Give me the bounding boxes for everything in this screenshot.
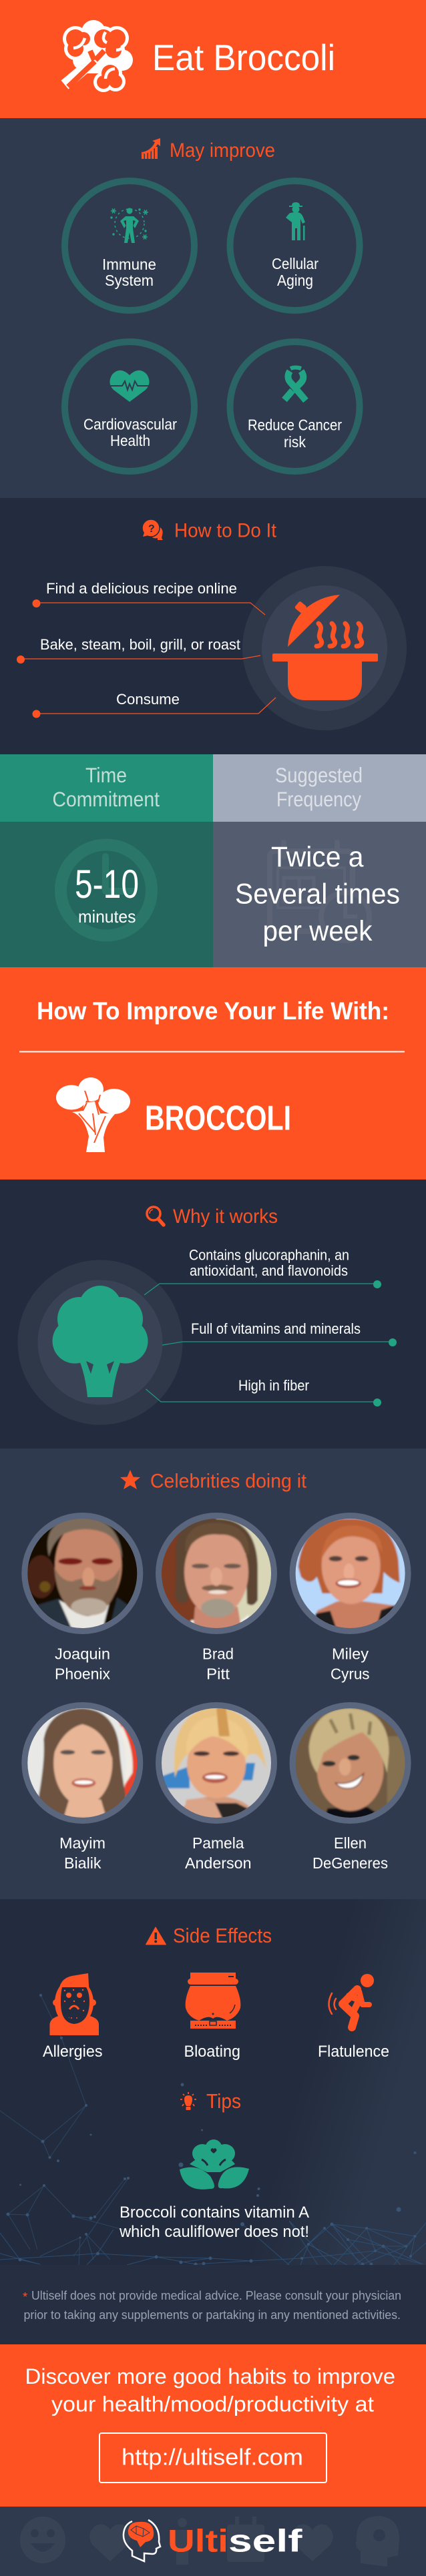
header banner <box>0 0 426 118</box>
celebrity names: Pitt <box>206 1665 230 1682</box>
url button: http://ultiself.com <box>122 2444 303 2470</box>
icon: magnifying glass <box>147 1207 164 1225</box>
footer watermark icons <box>20 2516 399 2567</box>
logo: self <box>228 2523 302 2558</box>
icon: question chat bubbles <box>142 519 163 540</box>
heading: celebrities doing it: Celebrities doing it <box>150 1470 307 1493</box>
celebrity names: Miley <box>332 1645 369 1662</box>
heading: time commitment: Time <box>85 763 127 787</box>
benefit: cellular aging: Aging <box>277 272 313 289</box>
panel: celebrities <box>0 1449 426 1899</box>
heading: tips <box>180 2089 241 2113</box>
frequency value: Several times <box>235 878 400 911</box>
heading: time commitment: Commitment <box>52 787 160 811</box>
tip text <box>119 2204 309 2241</box>
step: find recipe <box>32 580 265 615</box>
step: find recipe: Find a delicious recipe online <box>46 580 237 597</box>
benefit: reduce cancer risk: risk <box>284 433 306 451</box>
side effect: bloating: Bloating <box>184 2043 240 2061</box>
icon: face with rash <box>49 1973 99 2035</box>
tip text: which cauliflower does not! <box>119 2223 309 2241</box>
frequency value: per week <box>263 915 373 947</box>
panel: side effects and tips <box>0 1899 426 2266</box>
icon: rising chart <box>142 138 160 159</box>
call to action text: Discover more good habits to improve <box>25 2364 395 2388</box>
panel: disclaimer <box>0 2265 426 2344</box>
benefit: cellular aging <box>230 181 359 310</box>
panel: suggested frequency <box>213 754 426 967</box>
reason: glucoraphanin: antioxidant, and flavonoids <box>190 1262 348 1279</box>
heading: may improve: May improve <box>170 140 275 162</box>
call to action text: your health/mood/productivity at <box>51 2392 374 2416</box>
icon: immune person <box>110 208 148 243</box>
benefit: cardiovascular health: Cardiovascular <box>83 415 177 433</box>
step: consume: Consume <box>116 691 180 708</box>
side effect: bloating <box>184 1973 240 2061</box>
panel: disclaimer: Ultiself does not provide medical advice. Please consult your physician <box>31 2288 401 2302</box>
panel: call to action <box>0 2344 426 2507</box>
icon: elderly person with cane <box>286 202 305 240</box>
celebrity names: Phoenix <box>55 1665 110 1682</box>
step: cook <box>17 636 260 664</box>
benefit: immune system: Immune <box>102 256 156 273</box>
heading: why it works: Why it works <box>173 1206 278 1228</box>
icon: light bulb <box>180 2092 196 2110</box>
benefit: immune system <box>65 181 194 310</box>
reason: vitamins: Full of vitamins and minerals <box>191 1320 361 1337</box>
icon: green broccoli tree <box>52 1286 148 1397</box>
icon: person passing gas <box>329 1974 374 2027</box>
heading: suggested frequency <box>275 763 363 811</box>
celebrity names: Brad <box>202 1645 234 1662</box>
reason: fiber: High in fiber <box>238 1377 309 1394</box>
panel: disclaimer: prior to taking any supplements or partaking in any mentioned activities. <box>24 2308 401 2322</box>
title: Eat Broccoli <box>152 37 335 78</box>
celebrity names: Pamela <box>192 1834 244 1852</box>
panel: how to improve banner <box>0 967 426 1180</box>
panel: time commitment <box>0 754 213 967</box>
step: cook: Bake, steam, boil, grill, or roast <box>40 636 241 653</box>
heading: side effects: Side Effects <box>173 1924 272 1947</box>
celebrity names: Bialik <box>64 1854 101 1872</box>
celebrity names: Cyrus <box>331 1665 370 1682</box>
frequency value: Twice a <box>271 841 364 873</box>
celebrity names: Ellen <box>334 1834 367 1852</box>
reason: glucoraphanin: Contains glucoraphanin, an <box>189 1247 349 1263</box>
call to action text <box>25 2364 395 2416</box>
icon: bloated belly <box>186 1973 240 2029</box>
heading: suggested frequency: Frequency <box>276 787 361 811</box>
panel: footer <box>0 2507 426 2576</box>
cooking pot medallion <box>242 566 407 730</box>
portrait: Pamela Anderson <box>156 1702 277 1834</box>
url button <box>99 2433 327 2483</box>
benefit: cellular aging: Cellular <box>272 255 318 272</box>
reason: vitamins <box>162 1320 397 1346</box>
logo <box>124 2520 302 2561</box>
product name: BROCCOLI <box>145 1099 291 1137</box>
tip text: Broccoli contains vitamin A <box>120 2204 309 2222</box>
benefit: reduce cancer risk: Reduce Cancer <box>248 417 342 434</box>
step: consume <box>32 691 276 718</box>
portrait: Brad Pitt <box>156 1513 277 1634</box>
time value: minutes <box>78 907 136 927</box>
heading: tips: Tips <box>206 2089 241 2113</box>
celebrity names: DeGeneres <box>312 1854 388 1872</box>
icon: star <box>120 1470 140 1489</box>
celebrity names: Anderson <box>185 1854 251 1872</box>
side effect: allergies: Allergies <box>43 2043 103 2061</box>
benefit: immune system: System <box>105 272 154 289</box>
side effect: allergies <box>43 1973 103 2061</box>
panel: may improve <box>0 118 426 498</box>
portrait: Miley Cyrus <box>290 1513 411 1634</box>
icon: calendar watermark <box>270 842 369 941</box>
portrait: Joaquin Phoenix <box>21 1513 143 1634</box>
benefit: cardiovascular health: Health <box>110 432 150 449</box>
side effect: flatulence: Flatulence <box>318 2043 389 2061</box>
icon: awareness ribbon <box>284 367 306 401</box>
heading: may improve <box>142 138 275 162</box>
logo: Ulti <box>168 2523 228 2558</box>
icon: steaming pot <box>272 595 378 700</box>
heading: time commitment <box>52 763 160 811</box>
benefit: cardiovascular health <box>65 342 194 471</box>
panel: why it works <box>0 1180 426 1449</box>
portrait: Ellen DeGeneres <box>290 1702 411 1824</box>
icon: warning triangle <box>146 1927 166 1945</box>
broccoli medallion <box>17 1260 183 1425</box>
icon: head with brain network <box>124 2520 160 2561</box>
time value: 5-10 <box>75 862 139 907</box>
celebrity names <box>55 1645 388 1872</box>
icon: green cauliflower <box>180 2139 249 2189</box>
heading: how to do it: How to Do It <box>174 519 277 542</box>
time value <box>75 862 139 927</box>
icon: clock watermark <box>61 845 152 936</box>
reason: fiber <box>146 1377 381 1406</box>
reason: glucoraphanin <box>144 1247 381 1295</box>
panel: disclaimer: * <box>23 2290 27 2304</box>
benefit: reduce cancer risk <box>230 342 359 471</box>
frequency value <box>235 841 400 947</box>
celebrity names: Mayim <box>59 1834 105 1852</box>
side effect: flatulence <box>318 1974 389 2061</box>
panel: how to do it <box>0 498 426 754</box>
heading: suggested frequency: Suggested <box>275 763 363 787</box>
icon: question chat bubbles: ? <box>148 523 155 535</box>
banner heading: How To Improve Your Life With: <box>37 997 389 1025</box>
icon: heart with pulse <box>110 370 150 402</box>
icon: white broccoli <box>56 1077 130 1152</box>
icon: broccoli outline <box>63 20 133 92</box>
portrait: Mayim Bialik <box>21 1702 143 1824</box>
celebrity names: Joaquin <box>55 1645 110 1662</box>
